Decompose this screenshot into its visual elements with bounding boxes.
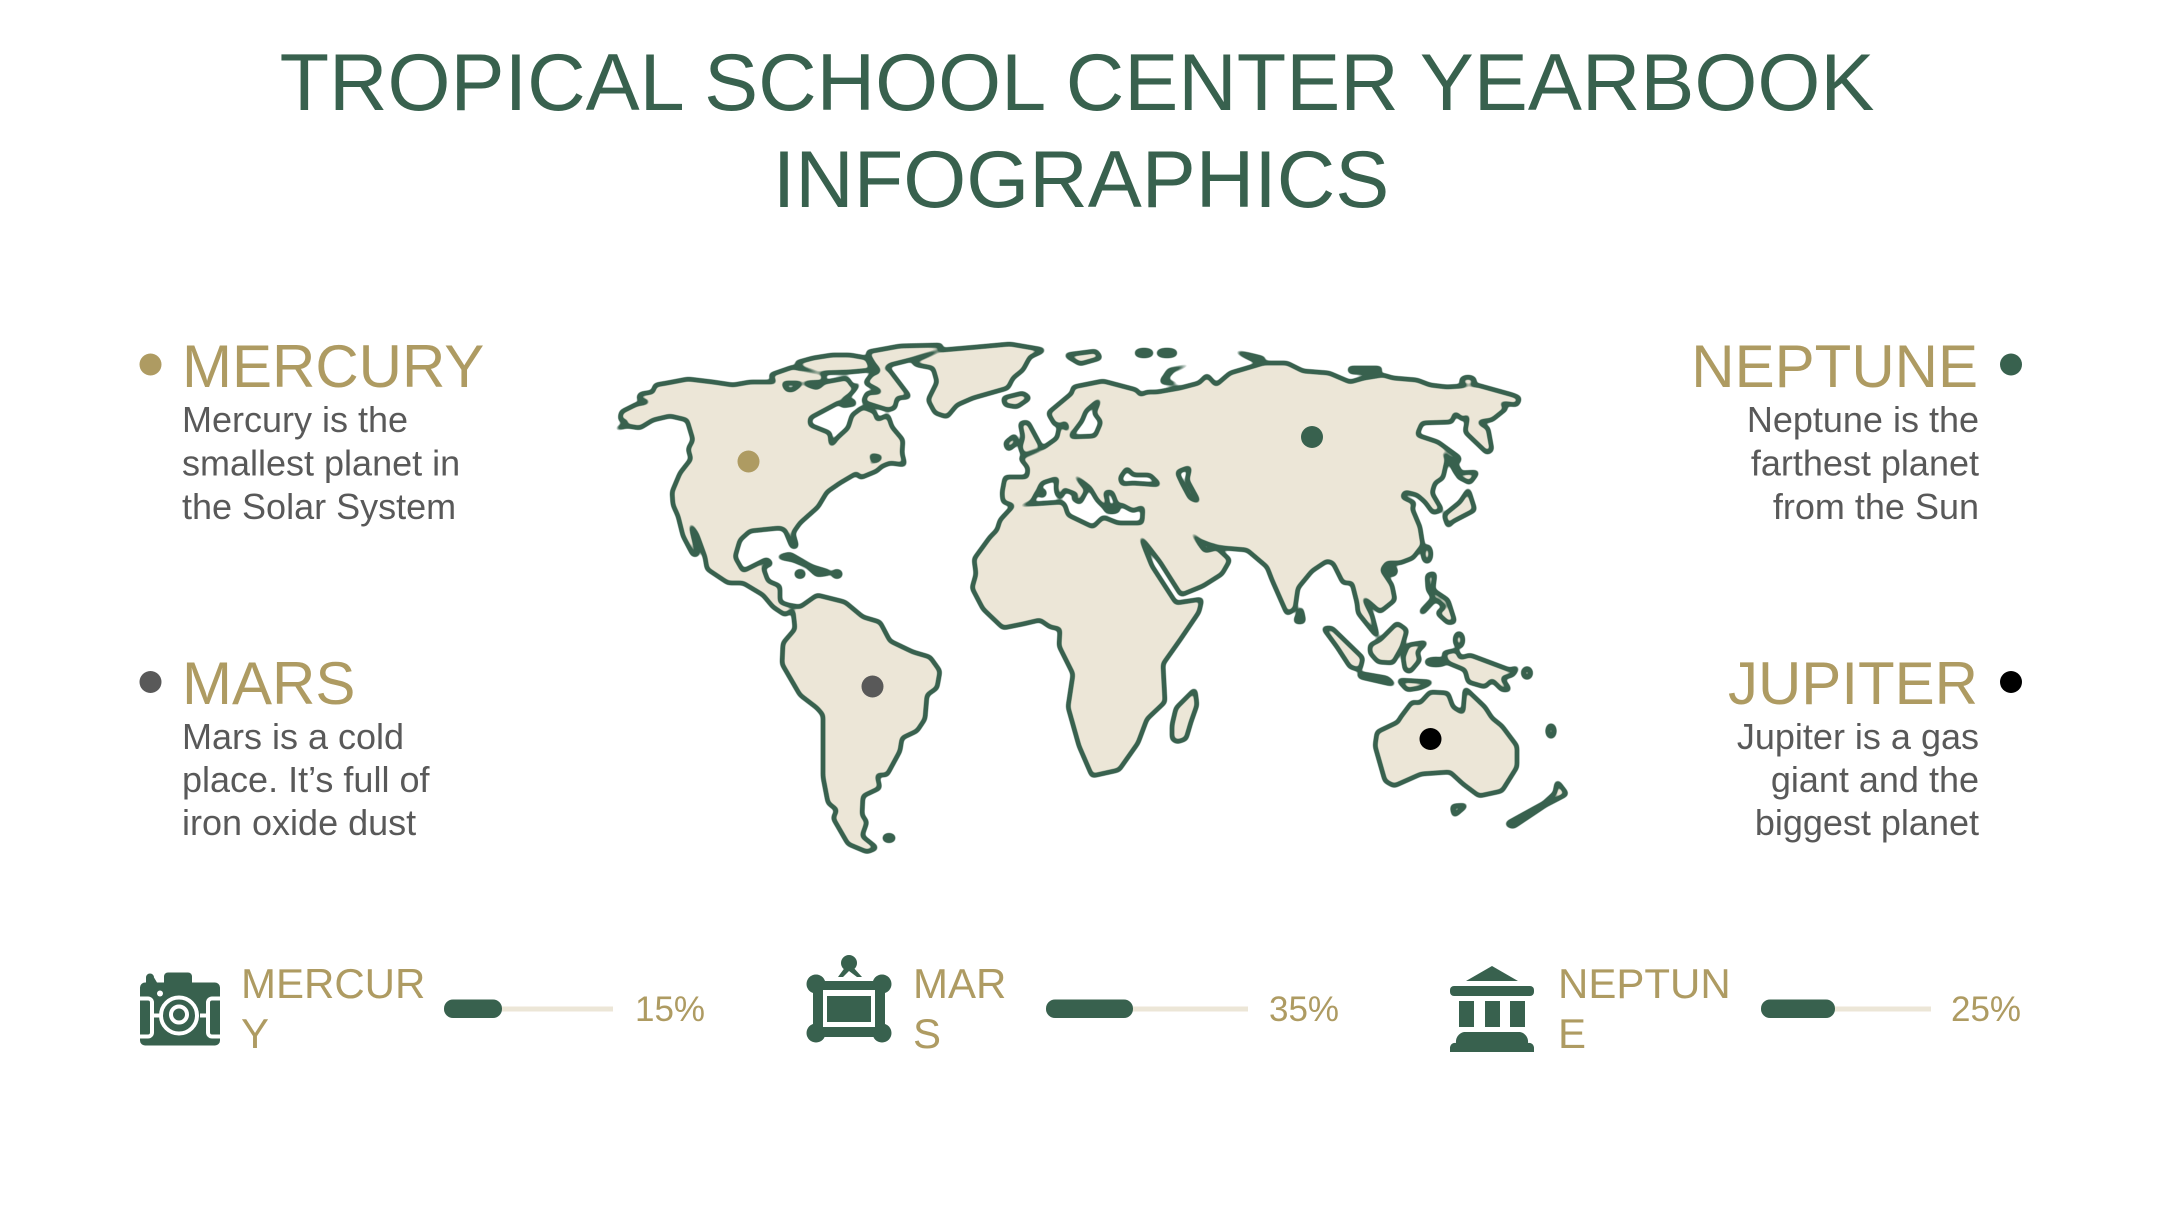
stat: Mercury 15% [138,960,705,1057]
label [913,960,1006,1057]
panel: Neptune: farthest planet [1751,442,1979,484]
value: 25% [1951,990,2021,1029]
map: Greenland [912,344,1045,417]
label: MERCUR [241,960,425,1007]
label [1558,960,1731,1057]
map: Caspian Sea [1177,467,1199,502]
panel: Neptune [1691,333,2022,527]
map marker: Mercury [738,450,760,472]
map: Caribbean [777,554,833,575]
panel: Mercury: smallest planet in [182,442,460,484]
map: Japan [1444,451,1460,475]
label: E [1558,1010,1586,1057]
map: Black Sea [1120,468,1160,485]
map: Indian Ocean islands [1172,689,1197,742]
panel: Jupiter: biggest planet [1755,802,1979,843]
label: S [913,1010,941,1057]
title [280,38,1874,225]
panel: Jupiter: JUPITER [1728,650,1978,717]
map: Southeast Asia [1427,573,1455,623]
panel: Neptune: NEPTUNE [1691,333,1978,400]
panel: Mars: place. It’s full of [182,759,430,800]
panel: Mercury: MERCURY [182,333,484,400]
map: Americas [614,378,940,852]
map: Afro-Eurasia [972,363,1520,776]
panel: Mars: MARS [182,650,355,717]
icon: picture frame [806,955,892,1042]
panel: Jupiter [1728,650,2022,843]
map marker: Neptune [1301,426,1323,448]
label: NEPTUN [1558,960,1731,1007]
map: northern islands [1161,363,1195,385]
map: British Isles [1020,422,1042,455]
panel: Mercury: Mercury is the [182,399,408,440]
icon: classical building [1450,966,1534,1052]
map: Mediterranean sea [1017,474,1143,527]
label [241,960,425,1057]
title: INFOGRAPHICS [773,135,1389,225]
panel: Mars: Mars is a cold [182,716,404,757]
label: MAR [913,960,1006,1007]
panel: Jupiter: giant and the [1771,759,1979,800]
value: 15% [635,990,705,1029]
progress bar [444,1000,613,1018]
progress bar [1761,1000,1931,1018]
map outlines [595,325,1585,865]
panel: Mars: iron oxide dust [182,802,416,843]
map marker: Mars [862,676,884,698]
map: Australia and New Zealand [1375,688,1517,796]
panel: Neptune: Neptune is the [1747,399,1979,440]
panel: Jupiter: Jupiter is a gas [1737,716,1979,757]
value: 35% [1269,990,1339,1029]
world map [595,325,1585,865]
label: Y [241,1010,269,1057]
map: Baltic sea [1070,399,1101,437]
icon: camera [138,972,222,1046]
title: TROPICAL SCHOOL CENTER YEARBOOK [280,38,1874,128]
stat: Neptune 25% [1450,960,2021,1057]
map marker: Jupiter [1420,728,1442,750]
panel: Mercury: the Solar System [182,486,456,527]
panel: Mercury [140,333,484,527]
progress bar [1046,1000,1248,1018]
stat: Mars 35% [806,955,1339,1057]
map: Arctic islands [863,368,910,410]
panel: Mars [140,650,430,843]
panel: Neptune: from the Sun [1773,486,1979,527]
